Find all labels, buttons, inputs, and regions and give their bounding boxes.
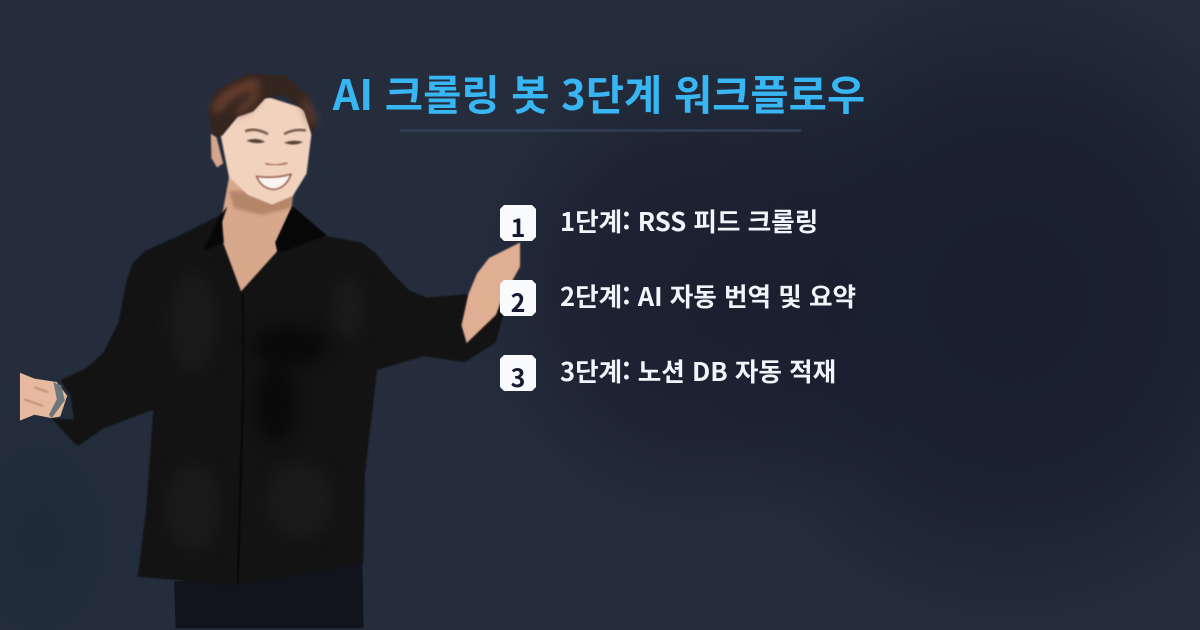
step 1 label: 1단계: RSS 피드 크롤링 bbox=[560, 202, 818, 239]
step 3 label: 3단계: 노션 DB 자동 적재 bbox=[560, 352, 836, 389]
hair highlight bbox=[217, 84, 313, 122]
badge: step 1 bbox=[500, 205, 536, 241]
nose shadow bbox=[265, 163, 288, 165]
trousers bbox=[174, 561, 364, 628]
eyes and brows bbox=[245, 130, 306, 145]
title: AI 크롤링 봇 3단계 워크플로우 bbox=[333, 62, 865, 122]
badge: step 2 bbox=[500, 280, 536, 316]
title underline bbox=[400, 129, 801, 132]
neck bbox=[220, 177, 293, 291]
left hand finger shadow bbox=[24, 387, 48, 406]
hair bbox=[208, 74, 317, 136]
badge: step 1: 1 bbox=[511, 209, 525, 245]
right forearm and hand bbox=[461, 243, 520, 343]
shirt bbox=[52, 206, 503, 585]
smile bbox=[257, 174, 291, 189]
ear bbox=[211, 134, 223, 167]
face bbox=[220, 96, 312, 205]
shirt dark shadow bbox=[251, 325, 327, 442]
left hand bbox=[20, 373, 67, 421]
wristwatch bbox=[49, 382, 65, 418]
neck shadow bbox=[229, 191, 293, 215]
shirt collar bbox=[203, 206, 327, 253]
badge: step 3: 3 bbox=[511, 359, 525, 395]
step 2 label: 2단계: AI 자동 번역 및 요약 bbox=[560, 277, 856, 314]
badge: step 2: 2 bbox=[511, 284, 525, 320]
badge: step 3 bbox=[500, 355, 536, 391]
shirt shading bbox=[165, 270, 365, 552]
shirt placket bbox=[238, 294, 244, 583]
